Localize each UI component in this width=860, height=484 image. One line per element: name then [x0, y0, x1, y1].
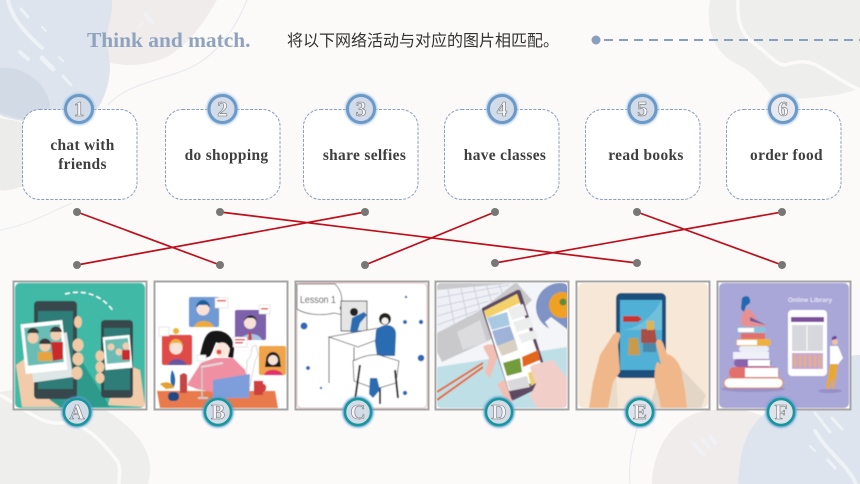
number badge 3: 3	[356, 97, 366, 121]
letter badge F: F	[775, 400, 787, 424]
picture C: online class	[296, 282, 428, 410]
letter badge A: A	[69, 400, 85, 424]
number badge 5: 5	[637, 97, 648, 121]
letter badge D: D	[491, 400, 507, 424]
number badge 3	[345, 93, 377, 125]
card 2: do shopping	[166, 110, 280, 200]
number badge 2	[206, 93, 238, 125]
card 5: read books: read books	[608, 147, 684, 164]
letter badge C: C	[350, 400, 366, 424]
number badge 2: 2	[217, 97, 228, 121]
picture D: ordering food on a phone	[436, 282, 584, 410]
letter badge A	[62, 396, 92, 428]
top connector dots	[73, 208, 786, 216]
number badge 1: 1	[74, 97, 84, 121]
card 1: chat with friends	[22, 110, 137, 200]
letter badge E	[624, 396, 656, 428]
number badge 6	[767, 93, 799, 125]
card 1: chat with friends: friends	[58, 156, 107, 173]
card 6: order food: order food	[750, 147, 823, 164]
number badge 6: 6	[778, 97, 788, 121]
instruction text: 将以下网络活动与对应的图片相匹配。	[287, 31, 559, 50]
title: Think and match.	[87, 28, 250, 52]
picture C: online class: Lesson 1	[300, 294, 336, 306]
letter badge F	[766, 396, 796, 428]
letter badge E: E	[633, 400, 647, 424]
number badge 5	[626, 93, 658, 125]
dashed header rule	[592, 36, 860, 44]
picture E: shopping on a tablet	[576, 282, 710, 410]
card 2: do shopping: do shopping	[185, 147, 268, 164]
card 1: chat with friends: chat with	[50, 137, 115, 154]
number badge 1	[63, 93, 95, 125]
number badge 4	[486, 93, 518, 125]
number badge 4: 4	[497, 97, 508, 121]
matching lines	[77, 212, 782, 265]
letter badge D	[484, 396, 514, 428]
picture F: online library	[718, 282, 850, 410]
card 5: read books	[586, 110, 700, 200]
letter badge B	[202, 396, 234, 428]
card 6: order food	[726, 110, 841, 200]
letter badge B: B	[211, 400, 225, 424]
card 3: share selfies: share selfies	[323, 147, 406, 164]
picture F: online library: Online Library	[788, 297, 832, 304]
picture A: sharing selfies on phones	[14, 282, 146, 410]
card 4: have classes: have classes	[464, 147, 546, 164]
bottom connector dots	[73, 259, 786, 269]
card 3: share selfies	[304, 110, 418, 200]
picture B: video chat with friends	[154, 282, 288, 410]
card 4: have classes	[444, 110, 559, 200]
letter badge C	[342, 396, 374, 428]
